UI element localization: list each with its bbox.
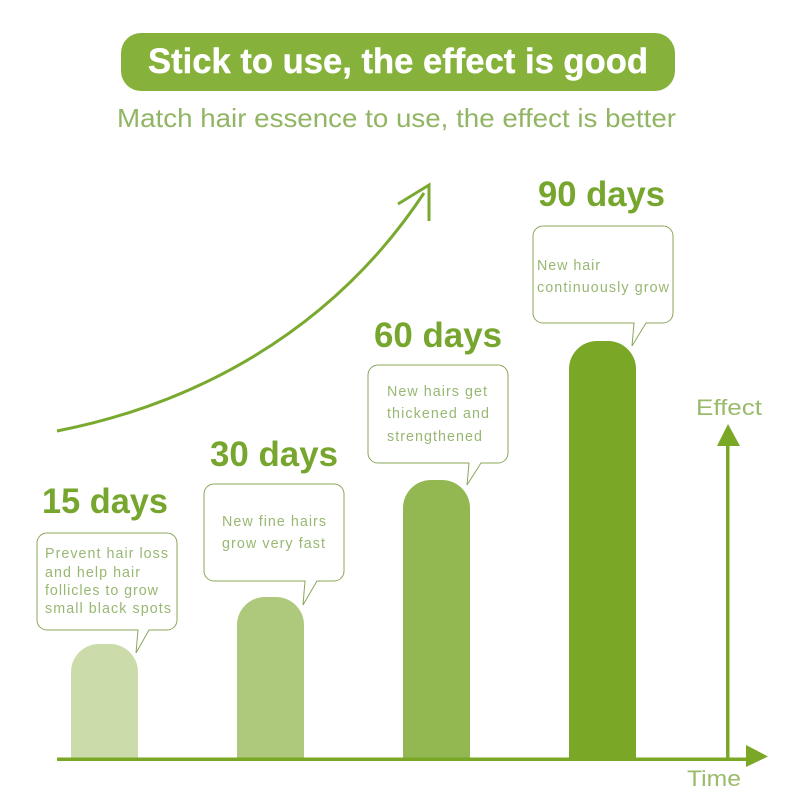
effect axis arrow [717, 424, 740, 759]
callout: 60 days: New hairs get [387, 384, 487, 400]
time axis arrow [57, 745, 768, 767]
callout: 30 days: grow very fast [222, 536, 325, 552]
heading: 30 days: 30 days [210, 435, 338, 474]
callout: 60 days: thickened and [387, 406, 489, 422]
axis label: effect: Effect [696, 395, 762, 420]
bar: 60 days [403, 480, 470, 758]
callout: 30 days: New fine hairs [222, 514, 326, 530]
heading: 15 days: 15 days [42, 482, 168, 521]
callout: 15 days: Prevent hair loss [45, 546, 168, 562]
heading: 60 days: 60 days [374, 316, 502, 355]
growth trend arrow [57, 185, 429, 431]
callout: 60 days [368, 365, 508, 485]
callout: 60 days: strengthened [387, 429, 482, 445]
axis label: time: Time [687, 766, 741, 791]
callout: 15 days: and help hair [45, 565, 140, 581]
title banner [121, 33, 675, 91]
callout: 90 days: New hair [537, 258, 600, 274]
callout: 15 days: follicles to grow [45, 583, 159, 599]
callout: 15 days: small black spots [45, 601, 171, 617]
subtitle: Match hair essence to use, the effect is better [117, 103, 676, 133]
callout: 30 days [204, 484, 344, 605]
bar: 15 days [71, 644, 138, 758]
bar: 90 days [569, 341, 636, 758]
bar: 30 days [237, 597, 304, 758]
callout: 90 days [533, 226, 673, 346]
heading: 90 days: 90 days [538, 175, 665, 214]
callout: 15 days [37, 533, 177, 653]
title banner: Stick to use, the effect is good [148, 42, 648, 81]
callout: 90 days: continuously grow [537, 280, 670, 296]
